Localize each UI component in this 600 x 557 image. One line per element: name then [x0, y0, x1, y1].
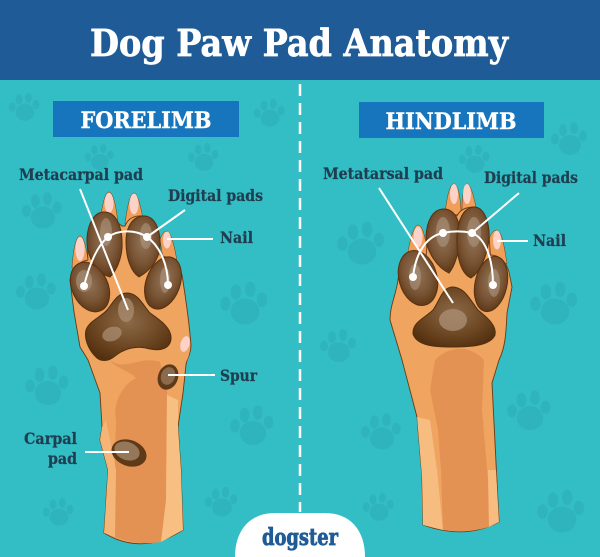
- forelimb labels: Digital pads: [168, 186, 263, 205]
- forelimb labels: Nail: [220, 228, 253, 247]
- pad highlights: forelimb: [76, 218, 170, 293]
- metatarsal pad: [413, 287, 495, 347]
- hindlimb heading: HINDLIMB: [386, 109, 516, 135]
- fur shading: forelimb: [110, 360, 167, 543]
- spur pad: [154, 361, 182, 393]
- fur shading: hindlimb: [430, 349, 489, 531]
- forelimb labels: pad: [48, 449, 77, 468]
- forelimb labels: [19, 165, 263, 468]
- forelimb labels: Carpal: [24, 429, 77, 448]
- forelimb labels: Spur: [220, 366, 258, 385]
- metacarpal pad: [85, 293, 171, 360]
- header band: [0, 0, 600, 80]
- forelimb leader lines: [80, 189, 215, 452]
- hindlimb labels: Nail: [533, 231, 566, 250]
- hindlimb labels: Digital pads: [484, 168, 578, 187]
- fur: forelimb: [70, 212, 191, 544]
- forelimb labels: Metacarpal pad: [19, 165, 143, 184]
- fur: hindlimb: [390, 207, 512, 532]
- hindlimb labels: Metatarsal pad: [323, 164, 443, 183]
- centre divider: [299, 84, 301, 512]
- hindlimb illustration: [390, 184, 512, 532]
- forelimb heading: [53, 101, 239, 137]
- digital pads: forelimb: [63, 212, 188, 318]
- forelimb illustration: [63, 192, 191, 544]
- nails: hindlimb: [408, 184, 507, 264]
- hindlimb leader lines: [379, 188, 528, 303]
- pad highlights: hindlimb: [409, 217, 500, 297]
- logo badge: [235, 513, 365, 557]
- logo badge: dogster: [262, 524, 339, 551]
- carpal pad: [108, 435, 150, 471]
- spur nail: [170, 337, 190, 365]
- digital pads: hindlimb: [392, 207, 512, 315]
- forelimb heading: FORELIMB: [80, 108, 212, 134]
- background paw prints: [9, 93, 587, 532]
- nails: forelimb: [72, 192, 178, 268]
- hindlimb labels: [323, 164, 578, 250]
- title: Dog Paw Pad Anatomy: [90, 21, 509, 65]
- hindlimb heading: [359, 102, 544, 138]
